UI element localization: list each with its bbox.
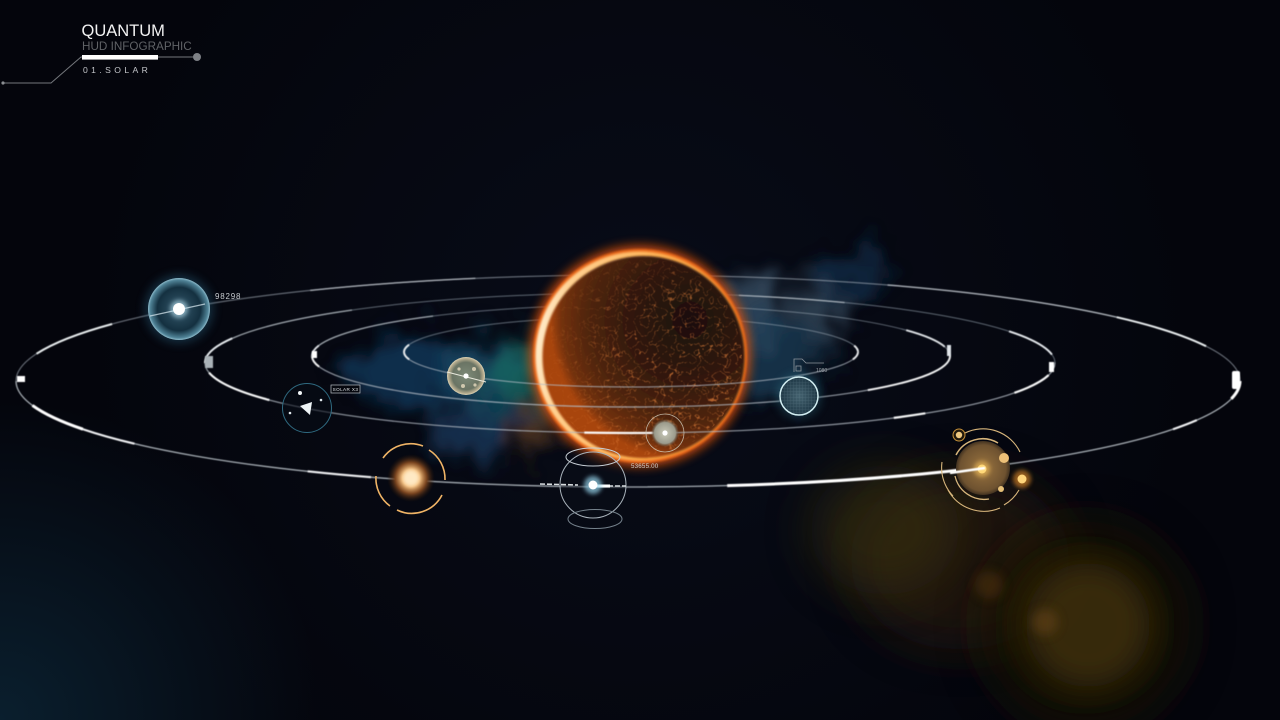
sun outer glow — [529, 245, 751, 467]
planet: wireframe globe — [540, 448, 659, 528]
connector line with nodes — [1, 53, 201, 85]
planet: beige sphere — [447, 357, 486, 395]
sun dark disk — [542, 256, 744, 458]
nebula clouds — [345, 254, 884, 454]
orbits: back arcs — [16, 275, 1240, 487]
label: data bracket: 1080 — [816, 368, 827, 374]
header block — [1, 22, 201, 85]
sun bright crescent rim — [536, 252, 744, 460]
planet: orange ring — [376, 444, 445, 513]
planet: blue grid sphere — [777, 359, 827, 418]
label: SOLAR X3: SOLAR X3 — [333, 387, 358, 392]
sun orange rim — [533, 249, 747, 463]
subtitle: HUD INFOGRAPHIC — [82, 40, 192, 53]
orbits: front arcs — [16, 275, 1240, 487]
planet: gray sphere on sun — [585, 414, 684, 452]
label: 53655.00: 53655.00 — [631, 463, 659, 470]
label: 98298: 98298 — [215, 292, 241, 301]
section label: 01.SOLAR — [83, 65, 151, 75]
planet: blue sphere — [145, 275, 241, 343]
sun surface cracks — [551, 260, 742, 455]
lens flare bokeh — [810, 465, 1190, 720]
sun — [529, 245, 755, 470]
planet: target with triangle — [282, 384, 360, 432]
planet: amber multi-moon system — [942, 429, 1031, 511]
title: QUANTUM — [82, 22, 165, 40]
